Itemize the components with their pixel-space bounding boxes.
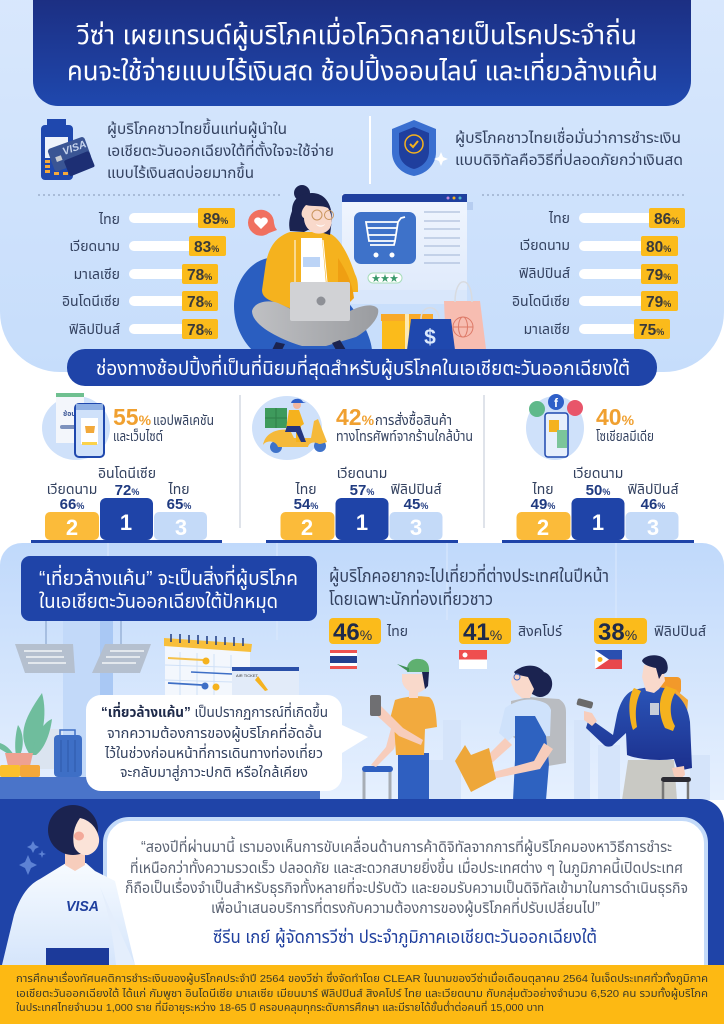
quote card [105, 819, 706, 968]
stat: Philippines 38%: 38% [598, 619, 637, 646]
sparkles [19, 841, 46, 875]
illustration: traveller with backpack [455, 666, 566, 800]
panel: phone orders: ทางโทรศัพท์จากร้านใกล้บ้าน [336, 428, 473, 444]
illustration: airport interior [0, 621, 320, 800]
divider [369, 116, 371, 184]
illustration: calendar and ticket [164, 634, 299, 700]
chart: right country bars: เวียดนาม [519, 237, 570, 253]
heading: revenge travel: “เที่ยวล้างแค้น” จะเป็นสิ่งที่ผู้บริโภค [39, 564, 298, 591]
quote card: “สองปีที่ผ่านมานี้ เรามองเห็นการขับเคลื่อนด้านการค้าดิจิทัลจากการที่ผู้บริโภคมองหาวิธีการชำระ [141, 836, 672, 856]
chart: left country bars: 78% [187, 267, 212, 284]
panel: social media: 40% [596, 404, 635, 430]
text: Thai consumers lead cashless [107, 118, 334, 182]
flag: Singapore [459, 650, 487, 669]
icon: phone app [42, 393, 110, 460]
podium chart: 72% [115, 482, 139, 499]
chart: left country bars: ไทย [98, 211, 120, 227]
pants [398, 753, 429, 800]
book [455, 745, 496, 792]
chart: left country bars: 78% [187, 294, 212, 311]
backpack [511, 697, 566, 766]
face [511, 674, 534, 698]
straps [629, 686, 677, 731]
text: travel intent: โดยเฉพาะนักท่องเที่ยวชาว [329, 586, 493, 609]
suitcase [364, 771, 390, 800]
chart: left country bars: ฟิลิปปินส์ [69, 321, 120, 337]
illustration: traveller with yellow backpack [576, 655, 692, 800]
illustration: traveller with green cap [362, 659, 437, 800]
stat: Philippines 38%: ฟิลิปปินส์ [654, 624, 706, 640]
chart: right country bars: 79% [646, 294, 671, 311]
icon: card terminal [41, 119, 95, 180]
chair [234, 258, 372, 350]
podium chart: 49% [531, 496, 555, 513]
quote card: เพื่อนำเสนอบริการที่ตรงกับความต้องการของผู้บริโภคที่ปรับเปลี่ยนไป” [211, 897, 600, 917]
forearm and phone [373, 706, 423, 745]
podium chart: 3 [410, 515, 422, 540]
panel: social media: โซเชียลมีเดีย [596, 428, 654, 444]
panel: phone orders [252, 396, 473, 543]
orange pack [658, 677, 681, 694]
head [642, 665, 665, 693]
stat: Singapore 41% [459, 618, 563, 669]
icon: heart bubble [248, 210, 277, 236]
arms [476, 738, 512, 768]
sweater [586, 687, 692, 771]
stat: Thailand 46%: ไทย [386, 624, 408, 640]
chart: right country bars: 75% [639, 322, 664, 339]
tee [390, 696, 437, 755]
text: travel intent: ผู้บริโภคอยากจะไปเที่ยวที่ต่างประเทศในปีหน้า [329, 563, 609, 588]
chart: right country bars: ไทย [548, 210, 570, 226]
podium chart: เวียดนาม [573, 465, 623, 481]
podium chart: 2 [301, 515, 313, 540]
chart: right country bars: ฟิลิปปินส์ [519, 265, 570, 281]
chart: right country bars: อินโดนีเซีย [512, 293, 570, 309]
title line 1: วีซ่า เผยเทรนด์ผู้บริโภคเมื่อโควิดกลายเป็นโรคประจำถิ่น [77, 16, 637, 51]
illustration: shopping bags: $ [424, 326, 436, 349]
chart: right country bars: มาเลเซีย [524, 321, 570, 337]
text: Thai consumers trust digital: ผู้บริโภคชาวไทยเชื่อมั่นว่าการชำระเงิน [455, 127, 681, 147]
icon: social phone [526, 394, 584, 460]
pants [622, 760, 677, 800]
callout bubble [86, 695, 368, 791]
podium chart: ไทย [531, 481, 554, 497]
podium chart: ฟิลิปปินส์ [390, 481, 442, 497]
podium chart: 1 [120, 510, 132, 535]
quote card: ที่เหนือกว่าทั้งความรวดเร็ว ปลอดภัย และสะดวกสบายยิ่งขึ้น เมื่อประเทศต่าง ๆ ในภูมิภาคนี้เปิดประเทศ [130, 857, 683, 877]
podium chart: 50% [586, 482, 610, 499]
icon: delivery scooter [252, 396, 327, 460]
podium chart: ฟิลิปปินส์ [627, 481, 679, 497]
torso [2, 863, 135, 965]
podium chart: 1 [592, 510, 604, 535]
footer: methodology note: ในประเทศไทยจำนวน 1,000 ราย ที่มีอายุระหว่าง 18-65 ปี ครอบคลุมทุกระดับการศึกษา และมีรายได้ขั้นต่ำต่อคนที่ 15,000 บาท [16, 1000, 544, 1014]
callout bubble: จะกลับมาสู่ภาวะปกติ หรือใกล้เคียง [120, 764, 308, 781]
quote attribution: ซีรีน เกย์ ผู้จัดการวีซ่า ประจำภูมิภาคเอเชียตะวันออกเฉียงใต้ [213, 927, 597, 949]
callout bubble: ไว้ในช่วงก่อนหน้าที่การเดินทางท่องเที่ยว [104, 743, 323, 762]
stat: Thailand 46%: 46% [333, 619, 372, 646]
chart: left country bars: 83% [194, 239, 219, 256]
hoodie [262, 232, 358, 310]
panel: phone orders: 42% [336, 404, 375, 430]
chart: left country bars: 78% [187, 322, 212, 339]
podium chart: ไทย [167, 481, 190, 497]
flag: Thailand [330, 650, 357, 669]
text: Thai consumers lead cashless: เอเชียตะวันออกเฉียงใต้ที่ตั้งใจจะใช้จ่าย [107, 140, 334, 160]
hair [514, 666, 552, 697]
heading: revenge travel: ในเอเชียตะวันออกเฉียงใต้ปักหมุด [39, 590, 278, 613]
chart: right country bars [512, 208, 685, 339]
podium chart: 45% [404, 496, 428, 513]
panel: social media [502, 394, 694, 543]
header banner [33, 0, 691, 106]
podium chart: อินโดนีเซีย [98, 465, 156, 481]
legs [252, 301, 378, 346]
footer: methodology note: เอเชียตะวันออกเฉียงใต้ ได้แก่ กัมพูชา อินโดนีเซีย มาเลเซีย เมียนมาร์ ฟิลิปปินส์ สิงคโปร์ ไทย และเวียดนาม กับกลุ่มตัวอย่างจำนวน 6,520 คน รวมทั้งผู้บริโภค [16, 987, 708, 1000]
callout bubble: “เที่ยวล้างแค้น” เป็นปรากฏการณ์ที่เกิดขึ้น [101, 701, 328, 721]
illustration: Visa executive [2, 805, 135, 965]
podium chart: 57% [350, 482, 374, 499]
text: Thai consumers lead cashless: แบบไร้เงินสดบ่อยมากขึ้น [107, 162, 254, 182]
icon: social phone: f [554, 396, 559, 410]
panel: phone orders: การสั่งซื้อสินค้า [375, 410, 452, 428]
podium chart: 3 [175, 515, 187, 540]
panel: revenge travel [0, 543, 724, 800]
chart: left country bars: เวียดนาม [69, 238, 120, 254]
hair [48, 805, 98, 855]
heading: revenge travel [21, 556, 317, 621]
chart: right country bars: 86% [654, 211, 679, 228]
podium chart: 2 [537, 515, 549, 540]
text: Thai consumers trust digital: แบบดิจิทัลคือวิธีที่ปลอดภัยกว่าเงินสด [455, 149, 683, 169]
flag: Philippines [595, 650, 622, 669]
panel: apps and websites: และเว็บไซต์ [113, 428, 163, 444]
laptop [290, 282, 350, 321]
chart: left country bars: 89% [203, 211, 228, 228]
stat: Singapore 41%: 41% [463, 619, 502, 646]
lower arm [371, 725, 400, 767]
text: Thai consumers lead cashless: ผู้บริโภคชาวไทยขึ้นแท่นผู้นำใน [107, 118, 287, 138]
face [73, 818, 99, 855]
icon: shield [392, 120, 448, 176]
podium chart: ไทย [294, 481, 317, 497]
hands and phone [584, 711, 597, 726]
text: travel intent [329, 563, 609, 609]
icon: card terminal: VISA [61, 138, 88, 158]
illustration: calendar and ticket: AIR TICKET [236, 673, 258, 678]
podium chart: 54% [294, 496, 318, 513]
panel: executive quote [0, 799, 724, 970]
panel: apps and websites: 55% [113, 404, 152, 430]
podium chart: 3 [647, 515, 659, 540]
podium chart: 46% [641, 496, 665, 513]
podium chart [31, 465, 222, 543]
logo: VISA [66, 898, 99, 915]
panel: apps and websites: แอปพลิเคชัน [153, 412, 214, 428]
stat: Thailand 46% [329, 618, 408, 669]
head [402, 674, 428, 693]
shirt [499, 699, 551, 741]
background panel: top [0, 0, 724, 372]
footer: methodology note: การศึกษาเรื่องทัศนคติการชำระเงินของผู้บริโภคประจำปี 2564 ของวีซ่า ซึ่งจัดทำโดย CLEAR ในนามของวีซ่าเมื่อเดือนตุลาคม 2564 ในเจ็ดประเทศทั่วทั้งภูมิภาค [16, 971, 708, 985]
podium chart: 66% [60, 496, 84, 513]
heading pill: shopping channels [67, 349, 657, 386]
chart: left country bars: มาเลเซีย [74, 266, 120, 282]
podium chart: เวียดนาม [337, 465, 387, 481]
podium chart: 2 [66, 515, 78, 540]
podium chart: 65% [167, 496, 191, 513]
stat: Singapore 41%: สิงคโปร์ [518, 624, 563, 640]
podium chart [502, 465, 694, 543]
heading pill: shopping channels: ช่องทางช้อปปิ้งที่เป็นที่นิยมที่สุดสำหรับผู้บริโภคในเอเชียตะวันออกเฉียงใต้ [96, 354, 630, 381]
panel: apps and websites [31, 393, 222, 543]
illustration: shopping browser window: ★★★ [371, 274, 399, 284]
chart: left country bars [62, 208, 235, 339]
illustration: shopping bags [381, 282, 486, 350]
neck [65, 845, 85, 871]
stat: Philippines 38% [594, 618, 706, 669]
hair and face [294, 185, 310, 201]
podium chart: 1 [356, 510, 368, 535]
callout bubble: จากความต้องการของผู้บริโภคที่อัดอั้น [107, 723, 322, 742]
title line 2: คนจะใช้จ่ายแบบไร้เงินสด ช้อปปิ้งออนไลน์ และเที่ยวล้างแค้น [67, 52, 658, 86]
footer: methodology note [0, 965, 724, 1024]
chart: right country bars: 80% [646, 239, 671, 256]
text: Thai consumers trust digital [455, 127, 683, 169]
podium chart: เวียดนาม [47, 481, 97, 497]
illustration: consumer with laptop [234, 185, 378, 350]
illustration: shopping browser window [342, 194, 473, 304]
chart: left country bars: อินโดนีเซีย [62, 293, 120, 309]
overalls [513, 716, 549, 800]
chart: right country bars: 79% [646, 267, 671, 284]
icon: phone app: ช้อป [63, 410, 76, 418]
podium chart [266, 465, 458, 543]
